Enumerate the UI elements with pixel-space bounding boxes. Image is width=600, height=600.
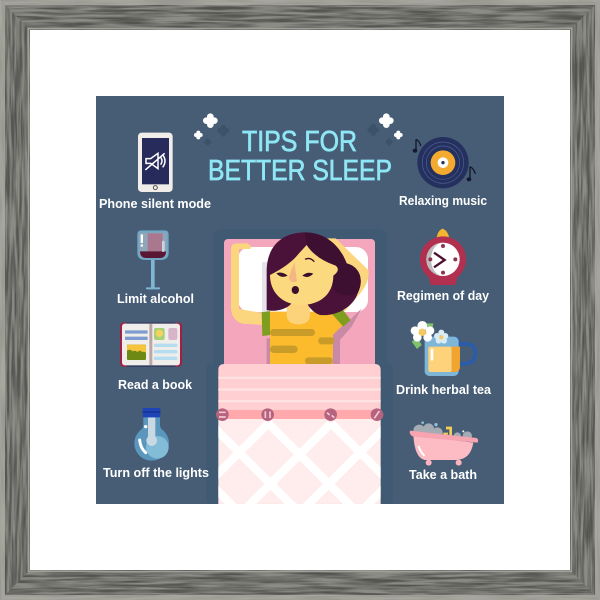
raised arms bbox=[231, 238, 369, 325]
icon: bathtub bbox=[410, 421, 478, 466]
eyebrow bbox=[305, 258, 314, 262]
mouth bbox=[292, 286, 299, 294]
icon: herbal tea cup bbox=[411, 321, 475, 376]
pillow bbox=[238, 247, 368, 312]
label: Take a bath: Take a bath bbox=[409, 467, 477, 482]
shirt sleeves bbox=[262, 307, 351, 336]
shirt stripes bbox=[270, 329, 334, 364]
label: Turn off the lights: Turn off the lights bbox=[103, 465, 209, 480]
icon: wine glass bbox=[137, 230, 169, 289]
label: Drink herbal tea: Drink herbal tea bbox=[396, 382, 492, 397]
title bbox=[208, 126, 392, 187]
blanket bbox=[216, 364, 384, 504]
icon: alarm clock bbox=[420, 229, 466, 285]
hair right shade bbox=[305, 232, 361, 295]
mattress bbox=[224, 239, 375, 369]
icon: phone silent mode bbox=[138, 133, 173, 192]
label: Relaxing music: Relaxing music bbox=[399, 193, 487, 208]
label: Limit alcohol: Limit alcohol bbox=[117, 291, 194, 306]
sleeping woman bbox=[231, 232, 369, 364]
label: Regimen of day: Regimen of day bbox=[397, 288, 490, 303]
title: TIPS FOR bbox=[242, 126, 357, 158]
neck bbox=[287, 300, 310, 324]
sparkles left bbox=[196, 117, 227, 144]
icon: vinyl record bbox=[413, 137, 475, 188]
shirt bbox=[268, 312, 343, 364]
blanket buttons bbox=[216, 408, 383, 421]
title: BETTER SLEEP bbox=[208, 155, 392, 187]
hair back bbox=[267, 232, 361, 315]
label: Read a book: Read a book bbox=[118, 377, 193, 392]
label: Phone silent mode: Phone silent mode bbox=[99, 196, 211, 211]
bed frame bbox=[206, 229, 393, 504]
dark blue poster panel bbox=[96, 96, 504, 504]
closed eyes bbox=[276, 273, 313, 277]
face bbox=[270, 245, 338, 305]
sparkles right bbox=[370, 117, 401, 144]
icon: light bulb bbox=[134, 408, 169, 461]
blanket lattice bbox=[218, 420, 381, 504]
body shadow bbox=[267, 308, 362, 364]
icon: open book bbox=[120, 323, 182, 367]
nose shadow bbox=[289, 262, 297, 282]
